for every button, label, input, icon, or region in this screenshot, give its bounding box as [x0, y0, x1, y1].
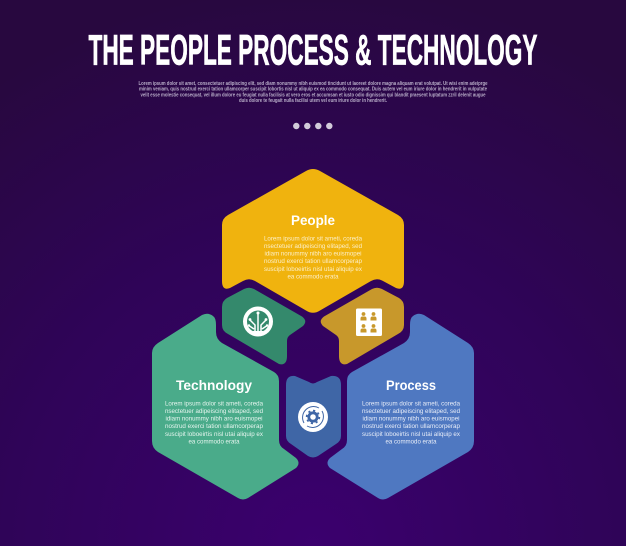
- text: process description: ea commodo erata: [386, 438, 437, 445]
- text: technology description: suscipit loboeirtis nisl utai aliquip ex: [165, 431, 264, 438]
- text: technology description: idiam nonummy nibh aro euismopei: [166, 416, 263, 422]
- text: people description: Lorem ipsum dolor sit ameti, coreda: [264, 236, 362, 242]
- text: technology description: nsectetuer adipeiscing elitaped, sed: [165, 408, 263, 415]
- text: technology description: Lorem ipsum dolor sit ameti, coreda: [165, 400, 263, 408]
- text: people description: [264, 236, 363, 280]
- text: people description: ea commodo erata: [288, 273, 339, 280]
- intro text block: velit esse molestie consequat, vel illum dolore eu feugiat nulla facilisis at vero eros et accumsan et iusto odio dignissim qui blandit praesent luptatum zzril delenit augue: [140, 92, 486, 98]
- intro text block: [138, 81, 488, 104]
- text: process description: [362, 400, 461, 445]
- heading: process: Process: [386, 378, 436, 393]
- icon: gear with orbit: [298, 402, 328, 432]
- intro text block: minim veniam, quis nostrud exerci tation ullamcorper suscipit lobortis nisl ut aliquip ex ea commodo consequat. Duis autem vel eum iriure dolor in hendrerit in vulputate: [139, 86, 487, 92]
- pagination dots: [293, 123, 332, 129]
- text: technology description: ea commodo erata: [188, 438, 240, 445]
- connector: gold segment: [321, 288, 404, 364]
- heading: technology: Technology: [176, 378, 252, 393]
- text: people description: nsectetuer adipeiscing elitaped, sed: [264, 243, 362, 250]
- text: process description: Lorem ipsum dolor sit ameti, coreda: [362, 400, 460, 408]
- text: people description: idiam nonummy nibh aro euismopei: [264, 250, 362, 258]
- connector: blue segment: [286, 376, 341, 458]
- panel: process hexagon: [328, 314, 474, 500]
- text: process description: nostrud exerci tation ullamcorperap: [362, 423, 460, 430]
- text: process description: nsectetuer adipeiscing elitaped, sed: [362, 408, 460, 415]
- text: process description: idiam nonummy nibh aro euismopei: [362, 416, 460, 422]
- text: technology description: [165, 400, 264, 445]
- connector: green segment: [222, 288, 305, 364]
- text: people description: suscipit loboeirtis nisl utai aliquip ex: [264, 266, 363, 273]
- text: people description: nostrud exerci tation ullamcorperap: [264, 258, 362, 265]
- text: technology description: nostrud exerci tation ullamcorperap: [165, 423, 263, 430]
- intro text block: duis dolore te feugait nulla facilisi utem vel eum iriure dolor in hendrerit.: [239, 98, 387, 104]
- icon: circuit tree: [243, 306, 273, 336]
- text: process description: suscipit loboeirtis nisl utai aliquip ex: [362, 431, 461, 438]
- panel: people hexagon: [222, 169, 404, 313]
- icon: people grid: [356, 308, 382, 336]
- heading: people: People: [291, 213, 335, 228]
- panel: technology hexagon: [152, 314, 298, 500]
- intro text block: Lorem ipsum dolor sit amet, consectetuer adipiscing elit, sed diam nonummy nibh euismod tincidunt ut laoreet dolore magna aliquam erat volutpat. Ut wisi enim adeiprge: [138, 81, 488, 87]
